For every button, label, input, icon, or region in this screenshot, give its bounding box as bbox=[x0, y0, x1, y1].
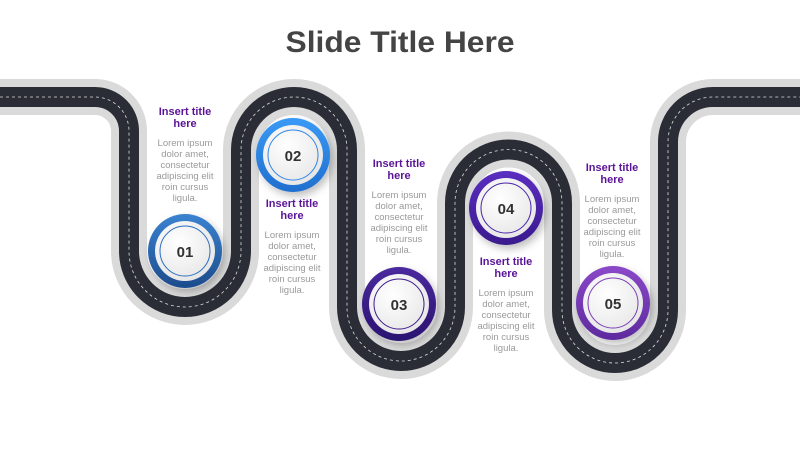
text block 05: here bbox=[600, 174, 624, 186]
text block 05: consectetur bbox=[587, 216, 637, 227]
road bbox=[0, 97, 800, 363]
step 02 circle: 02 bbox=[285, 148, 301, 165]
text block 04: dolor amet, bbox=[482, 299, 530, 310]
text block 04: ligula. bbox=[494, 343, 518, 354]
text block 04: adipiscing elit bbox=[477, 321, 535, 332]
text block 02: adipiscing elit bbox=[263, 263, 321, 274]
text block 01: adipiscing elit bbox=[156, 171, 214, 182]
text block 04: Insert title bbox=[480, 256, 532, 268]
text block 03: roin cursus bbox=[376, 234, 422, 245]
text block 02: ligula. bbox=[280, 285, 304, 296]
text block 02: consectetur bbox=[267, 252, 317, 263]
text block 05: Lorem ipsum bbox=[585, 194, 640, 205]
text block 02: dolor amet, bbox=[268, 241, 316, 252]
text block 03: adipiscing elit bbox=[370, 223, 428, 234]
text block 05: dolor amet, bbox=[588, 205, 636, 216]
text block 05: adipiscing elit bbox=[583, 227, 641, 238]
text block 02 bbox=[263, 198, 321, 296]
text block 01: dolor amet, bbox=[161, 149, 209, 160]
text block 01: ligula. bbox=[173, 193, 197, 204]
text block 01: here bbox=[173, 118, 197, 130]
text block 03: Insert title bbox=[373, 158, 425, 170]
text block 05: Insert title bbox=[586, 162, 638, 174]
text block 05: ligula. bbox=[600, 249, 624, 260]
text block 04: consectetur bbox=[481, 310, 531, 321]
step 04 circle: 04 bbox=[498, 201, 515, 218]
text block 02: Lorem ipsum bbox=[265, 230, 320, 241]
text block 04: here bbox=[494, 268, 518, 280]
step 05 circle: 05 bbox=[605, 296, 621, 313]
title: Slide Title Here bbox=[286, 26, 514, 59]
text block 03: consectetur bbox=[374, 212, 424, 223]
text block 05: roin cursus bbox=[589, 238, 635, 249]
step 03 circle: 03 bbox=[391, 297, 407, 314]
step 01 circle: 01 bbox=[177, 244, 193, 261]
text block 01 bbox=[156, 106, 214, 204]
text block 04: Lorem ipsum bbox=[479, 288, 534, 299]
text block 03: ligula. bbox=[387, 245, 411, 256]
text block 03: here bbox=[387, 170, 411, 182]
step 01 circle bbox=[148, 214, 222, 288]
text block 03: dolor amet, bbox=[375, 201, 423, 212]
text block 03 bbox=[370, 158, 428, 256]
text block 05 bbox=[583, 162, 641, 260]
step 02 circle bbox=[256, 118, 330, 192]
step 03 circle bbox=[362, 267, 436, 341]
text block 02: here bbox=[280, 210, 304, 222]
step 05 circle bbox=[576, 266, 650, 340]
text block 01: consectetur bbox=[160, 160, 210, 171]
text block 02: Insert title bbox=[266, 198, 318, 210]
step 04 circle bbox=[469, 171, 543, 245]
text block 02: roin cursus bbox=[269, 274, 315, 285]
text block 01: Lorem ipsum bbox=[158, 138, 213, 149]
text block 01: roin cursus bbox=[162, 182, 208, 193]
text block 01: Insert title bbox=[159, 106, 211, 118]
text block 04: roin cursus bbox=[483, 332, 529, 343]
text block 04 bbox=[477, 256, 535, 354]
text block 03: Lorem ipsum bbox=[372, 190, 427, 201]
